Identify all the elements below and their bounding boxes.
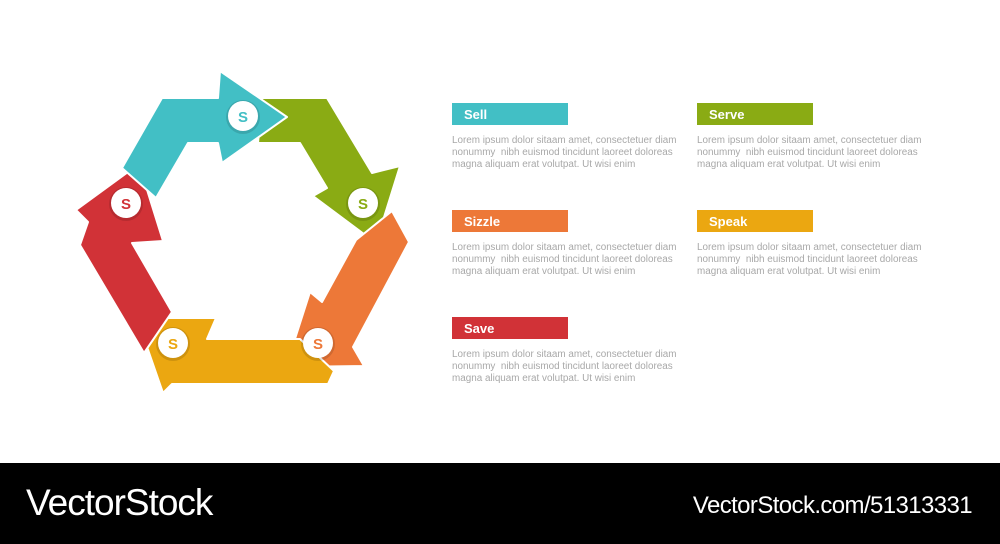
label: Serve xyxy=(697,103,813,125)
arrow: save red xyxy=(76,164,172,353)
label: Sell xyxy=(452,103,568,125)
label: Sizzle xyxy=(452,210,568,232)
icon circles: S xyxy=(238,109,248,126)
icon circles: S xyxy=(168,336,178,353)
text: Speak: Lorem ipsum dolor sitaam amet, consectetuer diam nonummy nibh euismod tincidunt laoreet doloreas magna aliquam erat volutpat. Ut wisi enim xyxy=(697,242,921,277)
label: Speak: Speak xyxy=(709,214,747,229)
text: Serve: Lorem ipsum dolor sitaam amet, consectetuer diam nonummy nibh euismod tincidunt laoreet doloreas magna aliquam erat volutpat. Ut wisi enim xyxy=(697,135,921,170)
text: Save: Lorem ipsum dolor sitaam amet, consectetuer diam nonummy nibh euismod tincidunt laoreet doloreas magna aliquam erat volutpat. Ut wisi enim xyxy=(452,349,676,384)
icon circles: S xyxy=(313,336,323,353)
arrow: speak yellow xyxy=(137,318,334,393)
footer xyxy=(0,463,1000,544)
arrow: sizzle orange xyxy=(286,211,409,367)
label: Speak xyxy=(697,210,813,232)
label: Save: Save xyxy=(464,321,494,336)
text: Sell: Lorem ipsum dolor sitaam amet, consectetuer diam nonummy nibh euismod tincidunt laoreet doloreas magna aliquam erat volutpat. Ut wisi enim xyxy=(452,135,676,170)
label: Sell: Sell xyxy=(464,107,487,122)
footer logo: VectorStock xyxy=(26,482,212,523)
cycle diagram xyxy=(78,72,408,391)
label: Save xyxy=(452,317,568,339)
arrow: sell teal xyxy=(122,71,287,198)
label: Sizzle: Sizzle xyxy=(464,214,500,229)
text: Sizzle: Lorem ipsum dolor sitaam amet, consectetuer diam nonummy nibh euismod tincidunt laoreet doloreas magna aliquam erat volutpat. Ut wisi enim xyxy=(452,242,676,277)
icon circles: S xyxy=(121,196,131,213)
icon circles: S xyxy=(358,196,368,213)
arrow: serve green xyxy=(258,98,400,243)
footer url: VectorStock.com/51313331 xyxy=(693,492,972,519)
label: Serve: Serve xyxy=(709,107,744,122)
icon circles xyxy=(109,100,380,361)
